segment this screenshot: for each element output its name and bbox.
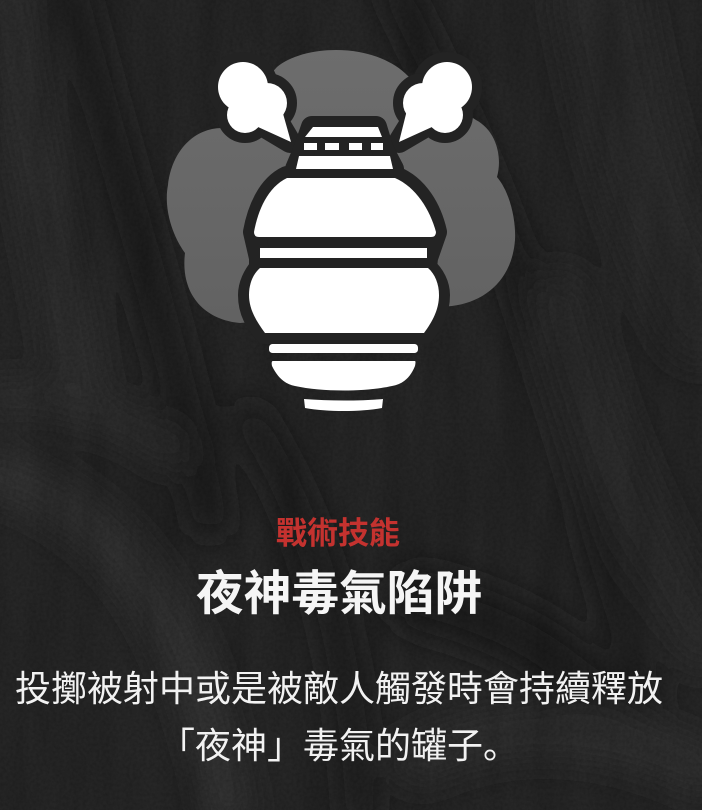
icon: canister outline [219, 63, 471, 333]
icon: canister body [249, 178, 439, 411]
description line 2: 「夜神」毒氣的罐子。 [159, 717, 519, 769]
description line 1: 投擲被射中或是被敵人觸發時會持續釋放 [15, 668, 663, 709]
icon: left steam puff [218, 62, 291, 142]
icon: poison gas canister [167, 50, 515, 411]
icon: grey gas cloud [167, 50, 515, 323]
category label: 戰術技能 [276, 516, 400, 551]
icon: canister cap and neck [296, 127, 393, 169]
title: 夜神毒氣陷阱 [196, 568, 482, 621]
icon: right steam puff [399, 62, 472, 142]
